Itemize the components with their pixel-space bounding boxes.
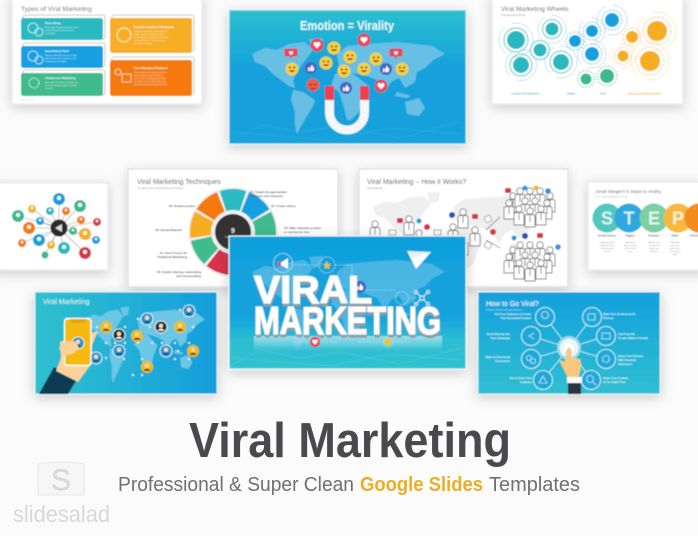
network dots — [232, 122, 460, 140]
emotion title: Emotion = Virality — [300, 19, 394, 33]
right labels: at The Right Time — [603, 380, 626, 384]
slide title: types: Types of Viral Marketing — [21, 6, 92, 13]
technique labels: #2: Create videos — [271, 204, 296, 208]
gear captions: #Use — [600, 92, 607, 96]
right labels: Share Your Content — [603, 376, 628, 380]
slide: viral marketing phone — [35, 292, 217, 394]
STEPS circles: T — [624, 208, 634, 228]
network links — [18, 199, 97, 255]
right labels: Sharing — [603, 316, 613, 320]
card: user-managed database: User-Managed Database — [134, 66, 168, 70]
avatars — [90, 305, 199, 373]
network dots — [232, 348, 460, 366]
card: pass along: Pass-along — [45, 21, 61, 25]
technique labels: #7: Don't Focus On — [160, 251, 187, 255]
main title: viral marketing — [254, 269, 442, 346]
slide collage — [0, 0, 698, 394]
card: undercover marketing: as users — [45, 88, 53, 90]
right labels: Visuals (Make it Visual) — [618, 336, 648, 340]
slide: viral marketing techniques — [128, 169, 338, 287]
right labels: Influencers — [618, 362, 633, 366]
left labels — [486, 312, 532, 384]
step descriptions: public spaces — [669, 248, 681, 250]
technique wheel: Viral Marketing — [225, 236, 242, 239]
technique labels — [155, 190, 321, 278]
spokes — [531, 317, 606, 380]
technique labels: #6: Enable sharing, embedding — [157, 270, 201, 274]
slide: emotion = virality — [229, 10, 466, 144]
world map — [252, 38, 445, 134]
hand holding phone — [39, 318, 98, 394]
step descriptions: that people — [670, 250, 680, 253]
step captions: Social Currency — [598, 234, 617, 238]
step captions: Triggers — [625, 234, 635, 238]
people crowd bottom — [504, 242, 555, 281]
main heading: Viral Marketing — [189, 414, 511, 468]
card: incentivized viral: company list and register — [45, 60, 68, 63]
blue gears — [566, 5, 627, 68]
slide: how it works — [359, 169, 568, 287]
magnet — [325, 86, 369, 130]
card: user-managed database: encourages others to sign up as well — [134, 83, 167, 86]
gear captions — [511, 92, 662, 96]
card: user-managed database: of contacts that naturally grows and — [134, 80, 165, 83]
step captions: Public — [671, 234, 679, 238]
card: edge/buzz marketing — [110, 15, 194, 53]
card: edge/buzz marketing: Discussion of the resulting controversy — [134, 36, 168, 39]
step descriptions: things that make — [600, 244, 614, 247]
main title: viral marketing: MARKETING — [254, 300, 441, 343]
step descriptions: into the context — [624, 244, 637, 247]
card: pass along — [21, 15, 105, 40]
step descriptions: Build stimuli — [625, 241, 636, 244]
people crowd top — [504, 188, 555, 227]
icon: heart — [310, 337, 320, 347]
slide subtitle: wheels: Viral Marketing Wheels — [501, 14, 526, 17]
technique labels: Traditional Marketing — [157, 255, 187, 259]
card: incentivized viral — [21, 43, 105, 68]
step descriptions: imitate — [672, 253, 678, 256]
step captions: Emotions — [649, 234, 660, 238]
left labels: Connection — [495, 359, 510, 363]
card: undercover marketing: Undercover Marketing — [45, 76, 76, 80]
icon: thumbs up — [354, 281, 366, 293]
step captions — [598, 234, 698, 238]
spoke circles — [522, 308, 616, 390]
main title: viral marketing: VIRAL — [254, 272, 372, 315]
step descriptions: followers — [650, 250, 658, 253]
technique labels: audience and channels — [250, 194, 283, 198]
card: edge/buzz marketing: can be published, to generate buzz — [134, 39, 165, 42]
right labels: With Powerful — [618, 358, 636, 362]
slide subtitle: techniques: The Best Online Viral Marketing Techniques — [137, 187, 184, 190]
step descriptions — [600, 241, 681, 256]
card: pass along: connections — [45, 32, 56, 35]
slide title: how to go viral: How to Go Viral? — [486, 301, 539, 308]
slide title: phone: Viral Marketing — [43, 299, 90, 306]
slide subtitle: steps: HOW TO MAKE A MESSAGE GO VIRAL — [595, 196, 628, 198]
STEPS circles — [592, 204, 698, 232]
title reflection — [254, 336, 442, 351]
sharing people — [370, 209, 480, 255]
logo: slidesalad — [13, 462, 110, 527]
left labels: Make an Emotional — [486, 355, 510, 359]
left labels: Audience — [520, 380, 532, 384]
step descriptions: we share with — [648, 244, 660, 247]
green gears — [578, 66, 617, 88]
icon: network — [414, 290, 430, 306]
subheading: Professional & Super Clean — [118, 474, 354, 496]
technique labels: #9: Reinforcement — [169, 204, 195, 208]
slide: people network — [0, 183, 108, 270]
subheading — [118, 474, 580, 496]
card: edge/buzz marketing: Edgy/Gossip/Buzz Marketing — [134, 25, 174, 29]
card: pass along: sends it onward to their circles of — [45, 29, 75, 32]
icon: yellow dot — [383, 337, 393, 347]
technique wheel — [188, 187, 278, 277]
card: incentivized viral: Rewards offered for the person who — [45, 54, 78, 57]
card: user-managed database: lists of contacts using a database, — [134, 74, 164, 77]
card: edge/buzz marketing: Create controversy by challenging the — [134, 30, 168, 33]
world map — [252, 256, 445, 352]
card: undercover marketing — [21, 70, 105, 96]
card: user-managed database: Users create and maintain their own — [134, 71, 166, 74]
world map — [85, 307, 205, 383]
technique labels: or service for free — [284, 230, 310, 234]
central button — [557, 336, 581, 360]
technique labels: #1: Target the appropriate — [250, 190, 287, 194]
technique labels: #3: Offer valuable product — [284, 226, 321, 230]
STEPS circles: E — [648, 208, 660, 228]
icon: star — [319, 257, 335, 273]
card: undercover marketing: message through reaction of people — [45, 84, 78, 87]
slide title: how it works: Viral Marketing – How it Works? — [367, 179, 466, 186]
spoke icons — [526, 312, 610, 385]
icon: megaphone — [274, 254, 292, 272]
left labels: Get Your Audience to Create — [495, 312, 531, 316]
logo: slidesalad: S — [51, 464, 71, 497]
slide: viral marketing wheels — [492, 0, 683, 104]
STEPS circles: S — [601, 208, 613, 228]
left labels: Get to Know Your — [510, 376, 532, 380]
network nodes — [12, 193, 101, 259]
right labels — [603, 312, 648, 384]
gear captions: Planning & Implementation — [628, 92, 662, 96]
icon: paper plane — [407, 251, 431, 269]
left labels: Your Generated Content — [500, 316, 531, 320]
card: edge/buzz marketing: border of taste or appropriateness — [134, 33, 164, 36]
step descriptions: and cool — [603, 251, 611, 253]
slide: types of viral marketing — [12, 0, 202, 104]
logo: slidesalad: slidesalad — [13, 501, 110, 527]
step descriptions: People talk about — [600, 241, 615, 244]
reaction icons — [284, 34, 408, 94]
slide footer: types: slidesalad.com — [21, 100, 35, 102]
STEPS circles: P — [672, 208, 684, 228]
step descriptions: about — [628, 250, 633, 253]
left labels: Build Sharing Into — [487, 332, 510, 336]
slide: how to go viral — [478, 292, 660, 394]
card: pass along: Encourage message to spread; a user — [45, 26, 79, 29]
right labels: Use Powerful — [618, 332, 635, 336]
network hub — [50, 220, 68, 236]
technique labels: and downloading — [176, 274, 201, 278]
right labels: Make Your Content worth — [603, 312, 636, 316]
social icons — [389, 186, 561, 250]
step descriptions: Build things — [670, 241, 680, 244]
left labels: Your Campaign — [490, 336, 510, 340]
card: user-managed database — [110, 57, 194, 96]
slide: viral marketing main — [229, 236, 466, 369]
main title: viral marketing: MARKETING — [254, 303, 442, 346]
right labels: Share Your Content — [618, 354, 643, 358]
faint map — [373, 192, 556, 283]
subheading: Templates — [489, 474, 580, 496]
icon connectors — [292, 265, 415, 342]
technique wheel: 9 — [231, 228, 235, 235]
gear captions: Content and Relevance — [511, 92, 540, 96]
card: incentivized viral: offers the brand to someone on the — [45, 57, 77, 60]
card: user-managed database: users in their self-propagating chain — [134, 77, 166, 80]
teal gears — [499, 15, 577, 80]
icon: dashed target — [396, 292, 408, 304]
slide title: wheels: Viral Marketing Wheels — [501, 6, 569, 13]
slide subtitle: how it works: viral marketing — [367, 187, 383, 190]
step descriptions: of what to talk — [624, 247, 636, 250]
slide: six steps to virality — [588, 182, 698, 270]
card: undercover marketing: Non-explicit marketing, to spread the — [45, 81, 78, 84]
card: edge/buzz marketing: and build knowledge — [134, 43, 153, 45]
subheading: Google Slides — [360, 474, 483, 496]
slide title: techniques: Viral Marketing Techniques — [137, 179, 221, 186]
gear captions: Action — [567, 92, 575, 96]
pointing hand — [559, 348, 582, 394]
step descriptions: friends and — [649, 247, 659, 250]
card: incentivized viral: Incentivized Viral — [45, 49, 69, 53]
main title: viral marketing: VIRAL — [254, 269, 372, 312]
yellow gears — [611, 12, 676, 80]
technique labels: #8: Social Network — [155, 228, 182, 232]
step descriptions: When we care, — [648, 241, 661, 244]
slide subtitle: how to go viral: 8 Steps to Reach a Broader Audience — [486, 308, 523, 312]
connection dots — [96, 309, 194, 376]
slide title: steps: Jonah Berger's 6 Steps to Virality — [595, 189, 662, 194]
branching arrows — [486, 217, 500, 248]
step descriptions: to be seen, — [670, 244, 680, 247]
step descriptions: them look good — [601, 247, 613, 250]
